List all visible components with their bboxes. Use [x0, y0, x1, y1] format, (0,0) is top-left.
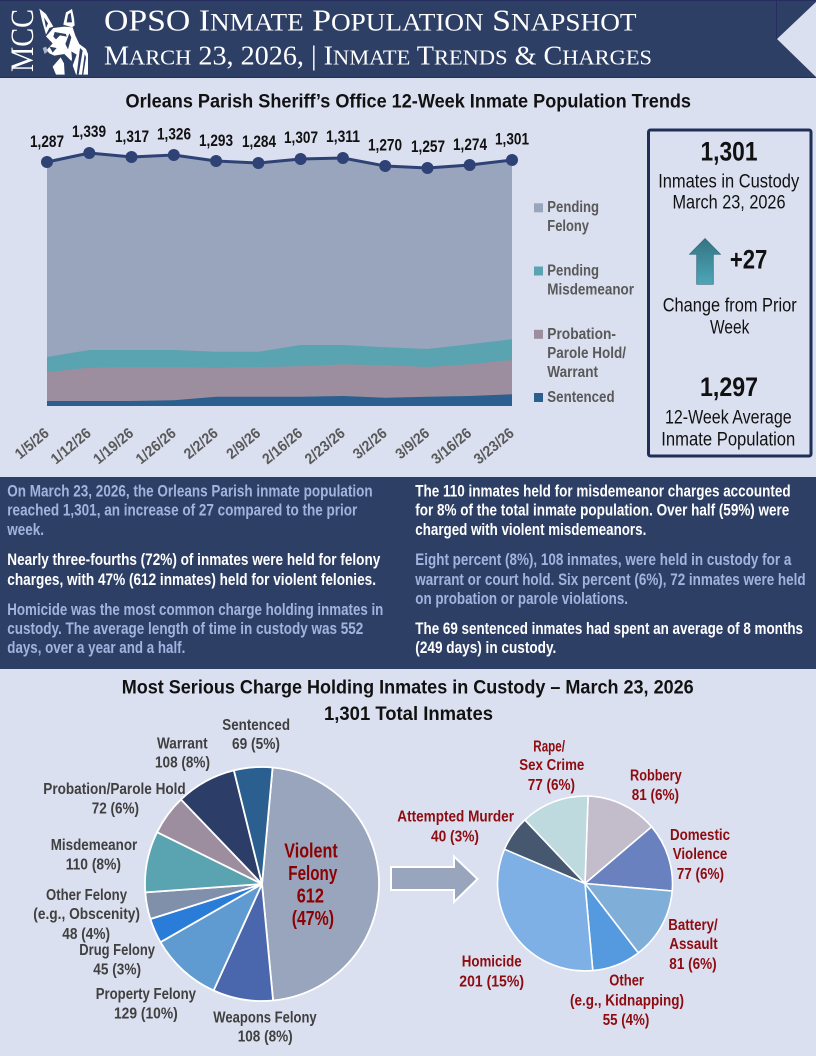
data labels: 1,317 — [115, 127, 149, 146]
data labels: 1,257 — [411, 137, 445, 156]
data labels: 1,326 — [157, 125, 191, 144]
labels: all charges pie: Probation/Parole Hold — [43, 781, 186, 798]
stat: 12-week average: 12-Week Average — [665, 407, 792, 428]
date axis labels: 3/9/26 — [392, 425, 433, 463]
date axis labels: 1/5/26 — [12, 425, 53, 463]
header banner — [0, 0, 816, 78]
labels: all charges pie: 69 (5%) — [232, 736, 280, 753]
date axis labels: 3/23/26 — [471, 425, 518, 468]
stat: inmates in custody: 1,301 — [700, 137, 758, 167]
data labels: 1,339 — [72, 122, 106, 141]
title line 2: MARCH 23, 2026, | I NMATE TRENDS & CHARGES — [104, 40, 652, 70]
chart heading: Orleans Parish Sheriff’s Office 12-Week Inmate Population Trends — [126, 90, 691, 112]
label: violent felony: (47%) — [292, 908, 334, 930]
charges heading: 1,301 Total Inmates — [324, 703, 493, 725]
stat: weekly change: +27 — [730, 244, 767, 274]
date axis labels: 1/12/26 — [48, 425, 95, 468]
labels: all charges pie: 110 (8%) — [66, 856, 121, 873]
labels: all charges pie: 129 (10%) — [114, 1005, 178, 1022]
stat: weekly change: Week — [710, 317, 750, 338]
data labels — [30, 122, 529, 156]
pie chart: violent felony breakdown — [498, 796, 673, 971]
text column: left: Nearly three-fourths (72%) of inmates were held for felony — [7, 551, 381, 569]
text column: left: week. — [6, 521, 44, 539]
labels: all charges pie: Other Felony — [46, 887, 127, 904]
data labels: 1,301 — [495, 130, 529, 149]
panel: narrative summary — [0, 477, 816, 669]
area: pending misdemeanor — [47, 339, 512, 406]
chart legend: Probation- — [547, 326, 616, 343]
labels: violent felony pie: 201 (15%) — [459, 974, 524, 991]
labels: all charges pie: Weapons Felony — [213, 1010, 317, 1027]
text column: left — [6, 482, 383, 657]
text column: left: days, over a year and a half. — [7, 639, 185, 657]
labels: all charges pie: 72 (6%) — [92, 800, 139, 817]
area: sentenced — [47, 394, 512, 406]
charges heading — [122, 676, 694, 725]
labels: violent felony pie: Sex Crime — [519, 757, 584, 774]
labels: violent felony pie: 81 (6%) — [669, 956, 717, 973]
labels: violent felony pie: 77 (6%) — [677, 866, 724, 883]
label: violent felony: 612 — [297, 886, 324, 908]
data labels: 1,270 — [368, 136, 402, 155]
labels: violent felony pie: Rape/ — [533, 739, 565, 756]
date axis labels: 2/23/26 — [302, 425, 349, 468]
labels: violent felony pie: 40 (3%) — [431, 829, 479, 846]
date axis labels: 1/19/26 — [90, 425, 137, 468]
stat: weekly change: Change from Prior — [663, 296, 797, 317]
labels: violent felony pie: Assault — [669, 936, 718, 953]
labels: all charges pie: 108 (8%) — [155, 754, 210, 771]
labels: violent felony pie: Homicide — [462, 954, 522, 971]
label: violent felony — [284, 841, 338, 930]
labels: violent felony pie: Battery/ — [668, 917, 718, 934]
labels: violent felony pie: 81 (6%) — [632, 787, 679, 804]
labels: violent felony pie — [397, 739, 730, 1029]
icon: up arrow — [690, 238, 720, 284]
text column: right: charged with violent misdemeanors. — [415, 521, 646, 539]
labels: violent felony pie: (e.g., Kidnapping) — [570, 993, 684, 1010]
label: violent felony: Felony — [288, 863, 338, 885]
logo: MCC wolf: MCC — [5, 9, 41, 72]
charges heading: Most Serious Charge Holding Inmates in Custody – March 23, 2026 — [122, 676, 694, 698]
stat: 12-week average: 1,297 — [700, 372, 758, 402]
data labels: 1,311 — [326, 127, 360, 146]
text column: left: Homicide was the most common charge holding inmates in — [7, 601, 383, 619]
chart legend: Warrant — [547, 364, 599, 381]
date axis labels: 2/2/26 — [181, 425, 222, 463]
panel: key numbers — [648, 130, 811, 456]
stacked area chart — [12, 122, 529, 468]
date axis labels: 3/16/26 — [428, 425, 475, 468]
text column: left: On March 23, 2026, the Orleans Parish inmate population — [7, 482, 373, 500]
data labels: 1,287 — [30, 132, 64, 151]
date axis labels: 3/2/26 — [350, 425, 391, 463]
data labels: 1,307 — [284, 128, 318, 147]
labels: all charges pie: 45 (3%) — [93, 961, 141, 978]
labels: violent felony pie: Domestic — [670, 827, 730, 844]
title line 1: OPSO I NMATE POPULATION SNAPSHOT — [104, 2, 636, 38]
labels: all charges pie — [33, 717, 317, 1046]
pie chart: all charges — [145, 767, 379, 1001]
arrow: to violent felony breakdown — [391, 856, 478, 902]
chart legend: Sentenced — [547, 389, 615, 406]
date axis labels: 2/16/26 — [259, 425, 306, 468]
data labels: 1,284 — [242, 132, 276, 151]
labels: all charges pie: 48 (4%) — [62, 926, 110, 943]
labels: violent felony pie: Other — [609, 973, 644, 990]
chart legend: Parole Hold/ — [547, 345, 626, 362]
area: probation-parole hold and warrant — [47, 360, 512, 406]
area: pending felony — [47, 153, 512, 406]
labels: all charges pie: Sentenced — [222, 717, 290, 734]
label: violent felony: Violent — [284, 841, 338, 863]
text column: right: on probation or parole violations. — [415, 590, 628, 608]
date axis labels — [12, 425, 518, 468]
labels: violent felony pie: 55 (4%) — [603, 1012, 649, 1029]
chart legend: Pending — [547, 262, 599, 280]
chart legend: Felony — [547, 218, 589, 235]
text column: right — [414, 482, 806, 657]
labels: all charges pie: Warrant — [157, 735, 208, 752]
labels: all charges pie: Property Felony — [96, 986, 196, 1003]
stat: 12-week average: Inmate Population — [661, 430, 795, 451]
data labels: 1,293 — [199, 131, 233, 150]
date axis labels: 2/9/26 — [223, 425, 264, 463]
data labels: 1,274 — [453, 135, 487, 154]
stat: inmates in custody: March 23, 2026 — [672, 193, 786, 214]
stat: 12-week average — [661, 372, 795, 451]
chart legend: Misdemeanor — [547, 282, 634, 298]
labels: violent felony pie: 77 (6%) — [528, 777, 575, 794]
stat: inmates in custody — [658, 137, 800, 214]
chart legend — [534, 199, 634, 406]
total population line — [41, 147, 518, 174]
stat: inmates in custody: Inmates in Custody — [658, 171, 800, 192]
text column: right: (249 days) in custody. — [415, 639, 556, 657]
labels: violent felony pie: Attempted Murder — [397, 809, 514, 826]
text column: left: charges, with 47% (612 inmates) held for violent felonies. — [7, 571, 376, 589]
labels: violent felony pie: Robbery — [630, 768, 682, 785]
labels: all charges pie: (e.g., Obscenity) — [33, 906, 140, 923]
labels: all charges pie: Misdemeanor — [51, 837, 137, 854]
labels: all charges pie: Drug Felony — [79, 942, 155, 959]
labels: violent felony pie: Violence — [673, 846, 727, 863]
text column: left: reached 1,301, an increase of 27 compared to the prior — [7, 502, 358, 520]
chart legend: Pending — [547, 199, 599, 216]
labels: all charges pie: 108 (8%) — [238, 1029, 293, 1046]
logo: MCC wolf — [5, 9, 88, 75]
text column: left: custody. The average length of time in custody was 552 — [7, 620, 363, 638]
date axis labels: 1/26/26 — [133, 425, 180, 468]
stat: weekly change — [663, 244, 797, 338]
